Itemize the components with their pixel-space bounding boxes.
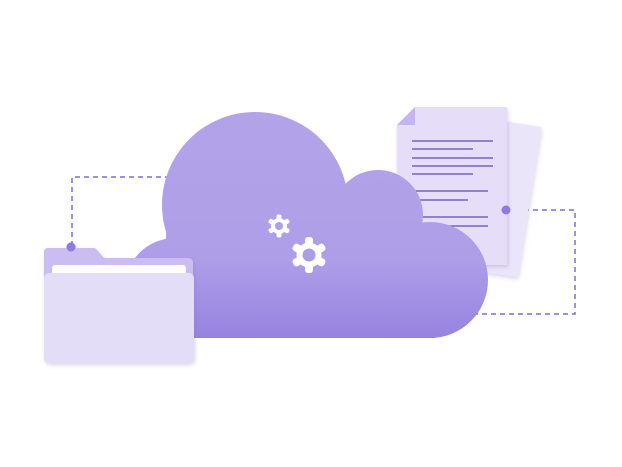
connector: documents to cloud <box>470 210 575 314</box>
icon: folder <box>44 242 194 363</box>
icon: gears <box>268 214 327 273</box>
cloud <box>125 112 488 338</box>
icon: documents <box>397 107 541 277</box>
connector: folder to cloud <box>66 177 170 252</box>
